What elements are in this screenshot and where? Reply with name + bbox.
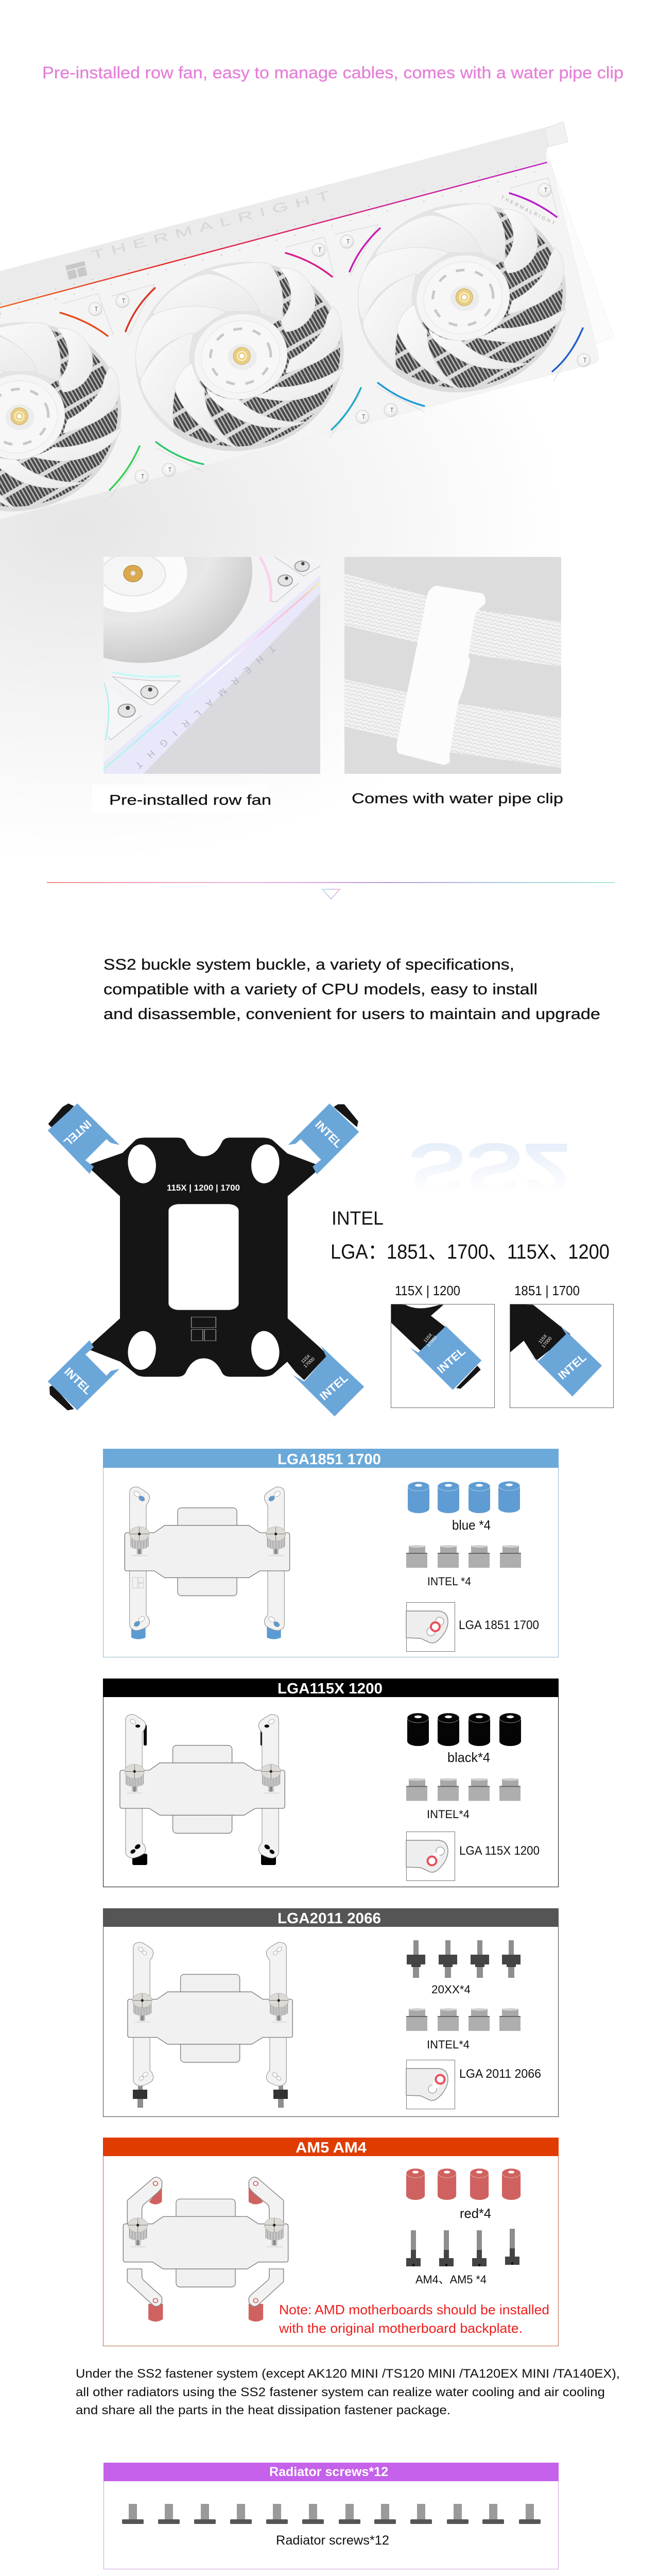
RGB corner arcs: [60, 193, 583, 490]
screws: [118, 561, 309, 717]
detail box: [406, 1832, 455, 1880]
clip labels: INTEL: [62, 1365, 94, 1397]
red note: Note: AMD motherboards should be installed: [279, 2302, 549, 2317]
box: 115X 1200 clip position: 17000: [426, 1334, 438, 1348]
red note: with the original motherboard backplate.: [279, 2320, 523, 2336]
intro paragraph: compatible with a variety of CPU models, easy to install: [103, 981, 537, 998]
label: Radiator screws*12: [276, 2533, 389, 2548]
panel: radiator screws: [103, 2463, 559, 2569]
header text: LGA115X 1200: [278, 1681, 383, 1697]
strip dot rows: [0, 162, 535, 314]
hero: white radiator with three fans: [0, 122, 614, 535]
intel caps: [406, 1778, 521, 1801]
row of screws: [122, 2504, 541, 2524]
rainbow line: [103, 582, 320, 769]
fan frame: [0, 163, 599, 519]
label intel: INTEL*4: [427, 2038, 470, 2051]
caption background: [92, 785, 267, 812]
label 1851 1700: 1851 | 1700: [514, 1283, 580, 1298]
mount diagram: [128, 1942, 292, 2108]
clip small labels: 115X: [300, 1353, 311, 1364]
clip small labels: [89, 1146, 317, 1369]
strip end cap: [545, 122, 568, 147]
RGB strip line: [0, 162, 547, 308]
clip labels: [61, 1117, 351, 1403]
radiator top strip: [0, 123, 568, 309]
header text: AM5 AM4: [296, 2140, 367, 2156]
hub: [103, 557, 187, 612]
header: [103, 1679, 559, 1697]
header: [103, 2138, 559, 2156]
header text: Radiator screws*12: [269, 2465, 388, 2479]
fastener compatibility paragraph: and share all the parts in the heat dissipation fastener package.: [76, 2403, 450, 2417]
label black: black*4: [447, 1750, 490, 1765]
title: Pre-installed row fan, easy to manage cables, comes with a water pipe clip: [42, 63, 623, 82]
panel: water pipe clip photo: [344, 557, 561, 774]
plate label: 115X | 1200 | 1700: [167, 1183, 240, 1193]
mount diagram: [123, 2177, 288, 2321]
label red: red*4: [460, 2206, 491, 2221]
label LGA 1851 1700: LGA 1851 1700: [459, 1618, 539, 1632]
mount diagram: [120, 1715, 285, 1865]
clip labels: INTEL: [313, 1118, 345, 1150]
gradient divider: [47, 882, 615, 883]
side panel: [546, 150, 614, 344]
label blue: blue *4: [452, 1517, 491, 1533]
clip small labels: 17000: [303, 1356, 316, 1369]
brand text: THERMALRIGHT: [133, 643, 278, 771]
panel: LGA1851 1700: [103, 1449, 559, 1657]
box: 115X 1200 clip position: 115X: [423, 1332, 433, 1344]
LGA socket list: LGA：1851、1700、115X、1200: [331, 1241, 610, 1263]
20XX screws: [407, 1940, 521, 1978]
label AM4 AM5: AM4、AM5 *4: [415, 2273, 487, 2286]
clip small labels: 17000: [300, 1149, 313, 1162]
lavender band: [103, 575, 320, 774]
clip small labels: 115X: [305, 1147, 316, 1158]
label LGA 115X 1200: LGA 115X 1200: [459, 1844, 540, 1858]
detail box: [406, 1602, 455, 1652]
corner plates: [112, 676, 180, 705]
panel: AM5 AM4: [103, 2138, 559, 2346]
AM screws: [406, 2229, 519, 2266]
backplate illustration: [48, 1104, 364, 1416]
fan 1: [0, 299, 143, 535]
red note: [279, 2302, 549, 2336]
panel: LGA115X 1200: [103, 1679, 559, 1887]
detail box: [406, 2060, 455, 2109]
grey background: [143, 594, 320, 774]
blue spacers: [408, 1481, 520, 1513]
fastener compatibility paragraph: all other radiators using the SS2 fastener system can realize water cooling and air cooling: [76, 2385, 605, 2399]
box: 115X 1200 clip position: INTEL: [435, 1345, 468, 1376]
strip brand text: THERMALRIGHT: [90, 187, 338, 263]
header text: LGA2011 2066: [278, 1910, 381, 1927]
box: 1851 1700 clip position: 115X: [537, 1333, 548, 1345]
label 115X 1200: 115X | 1200: [395, 1283, 460, 1298]
upper pipe: [344, 573, 561, 666]
blue clips: [48, 1104, 364, 1416]
header: [103, 2463, 559, 2481]
clip small labels: 115X: [94, 1353, 105, 1364]
caption: comes with water pipe clip: Comes with water pipe clip: [352, 790, 563, 806]
box: 1851 1700 clip position: 17000: [541, 1335, 553, 1349]
red spacers: [406, 2168, 521, 2200]
black feet: [48, 1104, 358, 1411]
intel caps: [406, 2008, 521, 2031]
label 20XX: 20XX*4: [431, 1983, 471, 1996]
strip logo: [65, 261, 88, 280]
label intel: INTEL *4: [427, 1575, 471, 1588]
caption: pre-installed row fan: Pre-installed row fan: [109, 792, 271, 808]
intro paragraph: and disassemble, convenient for users to maintain and upgrade: [103, 1006, 600, 1023]
lower pipe: [344, 679, 561, 768]
clip: [396, 586, 485, 765]
box: 115X 1200 clip position: [391, 1304, 494, 1408]
box: 1851 1700 clip position: INTEL: [556, 1351, 589, 1382]
fan opening: [103, 557, 252, 663]
INTEL heading: INTEL: [332, 1208, 384, 1229]
fastener compatibility paragraph: Under the SS2 fastener system (except AK120 MINI /TS120 MINI /TA120EX MINI /TA140EX),: [76, 2367, 620, 2381]
black plate: [86, 1138, 322, 1377]
black spacers: [407, 1713, 521, 1746]
clip small labels: 17000: [89, 1147, 102, 1159]
corner brand text: THERMALRIGHT: [500, 195, 556, 227]
frame corner outlines: [62, 178, 582, 497]
box: 1851 1700 clip position: [510, 1304, 614, 1408]
header text: LGA1851 1700: [278, 1451, 381, 1468]
SS2 ghost reflection: SS2: [409, 1128, 570, 1209]
label LGA 2011 2066: LGA 2011 2066: [459, 2067, 541, 2081]
panel: LGA2011 2066: [103, 1908, 559, 2116]
mount diagram: [125, 1487, 290, 1639]
frame screws: [89, 183, 591, 483]
intro paragraph: [103, 956, 600, 1023]
glow arcs: [112, 672, 180, 677]
page background gradient behind radiator: [0, 242, 659, 907]
header: [103, 1908, 559, 1927]
clip labels: INTEL: [317, 1371, 351, 1403]
clip labels: INTEL: [61, 1117, 94, 1149]
fastener compatibility paragraph: [76, 2367, 620, 2417]
clip small labels: 17000: [90, 1356, 102, 1369]
icon: down triangle: [322, 889, 340, 899]
label intel: INTEL*4: [427, 1808, 470, 1821]
panel: pre-installed row fan photo: [103, 557, 320, 774]
fan 3: [337, 180, 587, 416]
intro paragraph: SS2 buckle system buckle, a variety of specifications,: [103, 956, 514, 973]
intel caps: [406, 1545, 521, 1568]
header: [103, 1449, 559, 1468]
fan 2: [114, 239, 365, 474]
clip small labels: 115X: [93, 1151, 105, 1162]
